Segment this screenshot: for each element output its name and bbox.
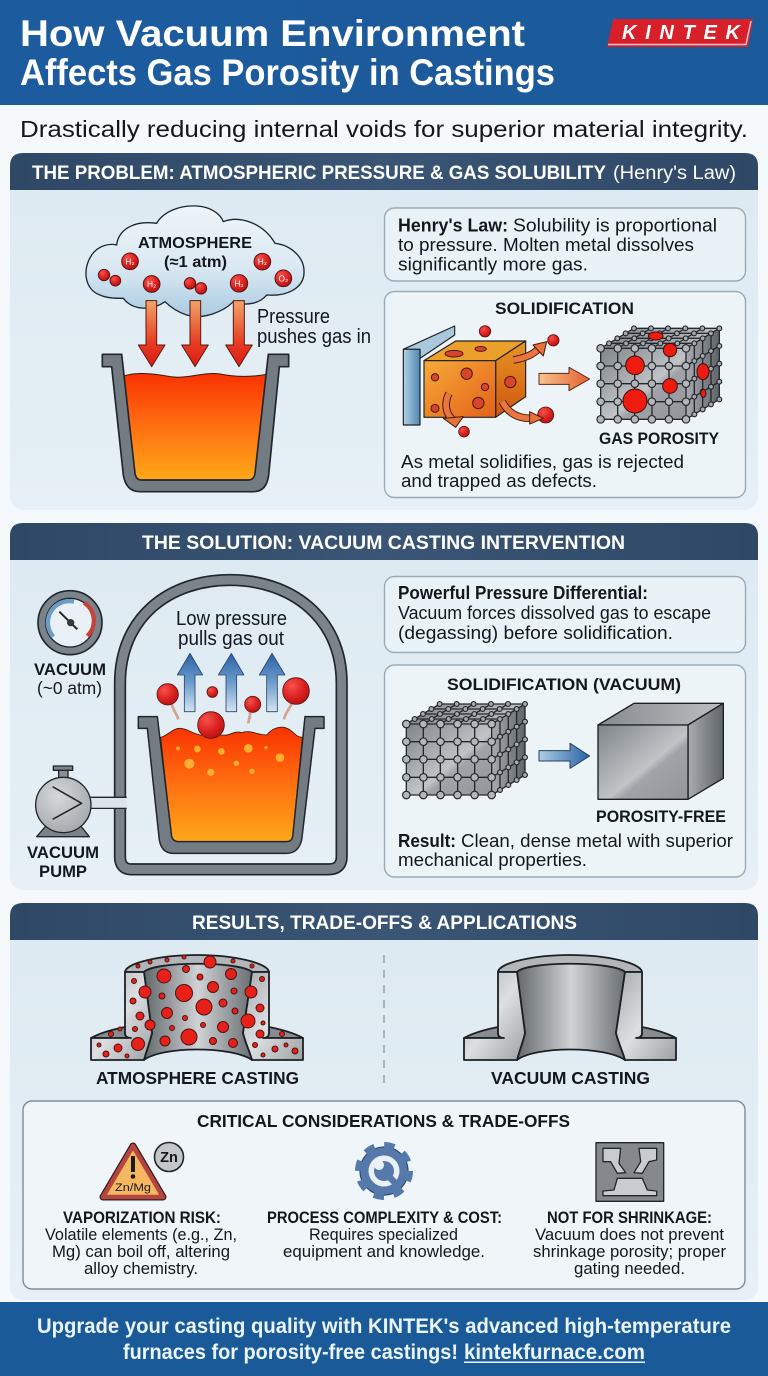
icon: warning triangle: Zn — [160, 1150, 178, 1166]
panel: the problem — [10, 153, 758, 510]
footer call to action: furnaces for porosity-free castings! — [123, 1340, 458, 1364]
text: vaporization risk: Volatile elements (e.g., Zn, — [45, 1225, 237, 1244]
icon: vacuum gauge — [38, 591, 102, 655]
icon: gear and wrench — [358, 1145, 410, 1197]
icon: gating mold — [596, 1143, 664, 1201]
section heading: problem — [10, 153, 758, 190]
title: Affects Gas Porosity in Castings — [20, 52, 555, 93]
section heading: problem: THE PROBLEM: ATMOSPHERIC PRESSURE & GAS SOLUBILITY — [32, 162, 606, 184]
callout: Henry's Law: significantly more gas. — [398, 254, 588, 274]
illustration: atmosphere cloud — [86, 206, 304, 316]
section heading: solution — [10, 523, 758, 560]
label: gas porosity: GAS POROSITY — [599, 430, 719, 448]
icon: warning triangle: Zn/Mg — [115, 1182, 151, 1194]
text: solidification explanation — [401, 451, 684, 491]
label: vacuum pump — [27, 843, 99, 881]
label: low pressure: Low pressure — [176, 608, 287, 630]
text: not for shrinkage: gating needed. — [574, 1259, 685, 1278]
footer call to action: kintekfurnace.com — [464, 1340, 645, 1364]
heading: critical considerations: CRITICAL CONSIDERATIONS & TRADE-OFFS — [197, 1111, 570, 1131]
label: atmosphere casting: ATMOSPHERE CASTING — [96, 1068, 299, 1088]
label: pressure pushes gas in: pushes gas in — [257, 326, 371, 348]
text: result — [398, 830, 733, 870]
callout: pressure differential: (degassing) before solidification. — [398, 622, 673, 643]
label: low pressure: pulls gas out — [178, 628, 284, 650]
heading: solidification vacuum: SOLIDIFICATION (VACUUM) — [447, 675, 681, 694]
label: vacuum: (~0 atm) — [37, 678, 102, 698]
footer call to action: Upgrade your casting quality with KINTEK's advanced high-temperature — [37, 1314, 731, 1338]
label: vacuum pump: PUMP — [39, 862, 87, 881]
text: process complexity — [267, 1209, 502, 1261]
illustration: atmosphere cloud: H₂ — [258, 257, 267, 267]
text: result: Clean, dense metal with superior — [461, 830, 733, 851]
title: How Vacuum Environment — [20, 13, 525, 54]
text: not for shrinkage: shrinkage porosity; proper — [533, 1242, 726, 1261]
arrow: to gas porosity — [539, 367, 590, 391]
section heading: results — [10, 903, 758, 940]
panel: solidification in vacuum — [384, 665, 746, 877]
header banner — [0, 0, 768, 105]
text: vaporization risk: alloy chemistry. — [84, 1259, 198, 1278]
footer call to action — [0, 1302, 768, 1376]
illustration: atmosphere cloud: H₂ — [234, 278, 244, 288]
callout: Henry's Law: to pressure. Molten metal dissolves — [398, 234, 694, 255]
illustration: solid metal block — [598, 703, 723, 799]
label: vacuum: VACUUM — [34, 660, 106, 679]
panel: critical considerations — [23, 1101, 745, 1289]
illustration: vacuum chamber — [87, 580, 342, 869]
text: not for shrinkage: Vacuum does not prevent — [535, 1225, 724, 1244]
illustration: atmosphere cloud: (≈1 atm) — [164, 254, 227, 271]
logo: KINTEK: KINTEK — [622, 22, 742, 44]
text: process complexity: Requires specialized — [309, 1225, 458, 1244]
arrows: gas pulled upward — [177, 653, 285, 712]
subtitle: Drastically reducing internal voids for superior material integrity. — [20, 116, 748, 142]
text: result: mechanical properties. — [398, 849, 587, 870]
illustration: solidifying cube rejecting gas — [403, 326, 559, 437]
label: porosity-free: POROSITY-FREE — [596, 808, 726, 826]
illustration: crucible with molten metal — [102, 354, 289, 492]
panel: the solution — [10, 523, 758, 890]
callout: Henry's Law — [384, 208, 746, 281]
text: not for shrinkage — [533, 1209, 726, 1278]
illustration: atmosphere cloud: ATMOSPHERE — [138, 235, 252, 252]
text: vaporization risk — [45, 1209, 237, 1278]
illustration: atmosphere cloud: H₂ — [147, 279, 156, 289]
label: vacuum pump: VACUUM — [27, 843, 99, 862]
text: vaporization risk: Mg) can boil off, altering — [52, 1242, 230, 1261]
icon: warning triangle — [103, 1142, 184, 1197]
text: solidification explanation: and trapped as defects. — [401, 470, 597, 491]
heading: solidification: SOLIDIFICATION — [495, 299, 634, 318]
illustration: vacuum pump — [36, 766, 91, 837]
callout: pressure differential — [384, 576, 746, 652]
callout: Henry's Law: Solubility is proportional — [513, 214, 717, 236]
callout: pressure differential: Vacuum forces dissolved gas to escape — [398, 602, 711, 623]
text: result: Result: — [398, 830, 456, 851]
illustration: atmosphere casting with pores — [91, 955, 303, 1060]
label: pressure pushes gas in — [257, 306, 371, 348]
callout: Henry's Law: Henry's Law: — [398, 214, 508, 236]
illustration: atmosphere cloud: H₂ — [125, 256, 135, 266]
illustration: atmosphere cloud: O₂ — [278, 273, 288, 283]
illustration: porous lattice — [601, 328, 719, 419]
arrow: to porosity-free block — [539, 743, 590, 768]
callout: pressure differential: Powerful Pressure Differential: — [398, 583, 648, 603]
section heading: solution: THE SOLUTION: VACUUM CASTING INTERVENTION — [142, 532, 625, 554]
section heading: problem: (Henry's Law) — [613, 162, 736, 184]
label: pressure pushes gas in: Pressure — [257, 306, 330, 328]
text: not for shrinkage: NOT FOR SHRINKAGE: — [547, 1209, 712, 1227]
arrows: pressure pushing down — [138, 301, 252, 367]
text: process complexity: PROCESS COMPLEXITY & COST: — [267, 1209, 502, 1227]
text: solidification explanation: As metal solidifies, gas is rejected — [401, 451, 684, 472]
illustration: clean lattice — [406, 704, 525, 795]
text: vaporization risk: VAPORIZATION RISK: — [63, 1209, 221, 1227]
panel: results — [10, 903, 758, 1300]
label: vacuum casting: VACUUM CASTING — [491, 1068, 650, 1088]
illustration: vacuum casting — [464, 955, 676, 1060]
label: low pressure — [176, 608, 287, 650]
title — [20, 13, 555, 93]
logo: KINTEK — [607, 19, 753, 47]
illustration: degassing crucible — [138, 678, 324, 853]
text: process complexity: equipment and knowledge. — [283, 1242, 485, 1261]
label: vacuum — [34, 660, 106, 698]
section heading: results: RESULTS, TRADE-OFFS & APPLICATIONS — [192, 912, 577, 934]
panel: solidification — [384, 292, 746, 498]
